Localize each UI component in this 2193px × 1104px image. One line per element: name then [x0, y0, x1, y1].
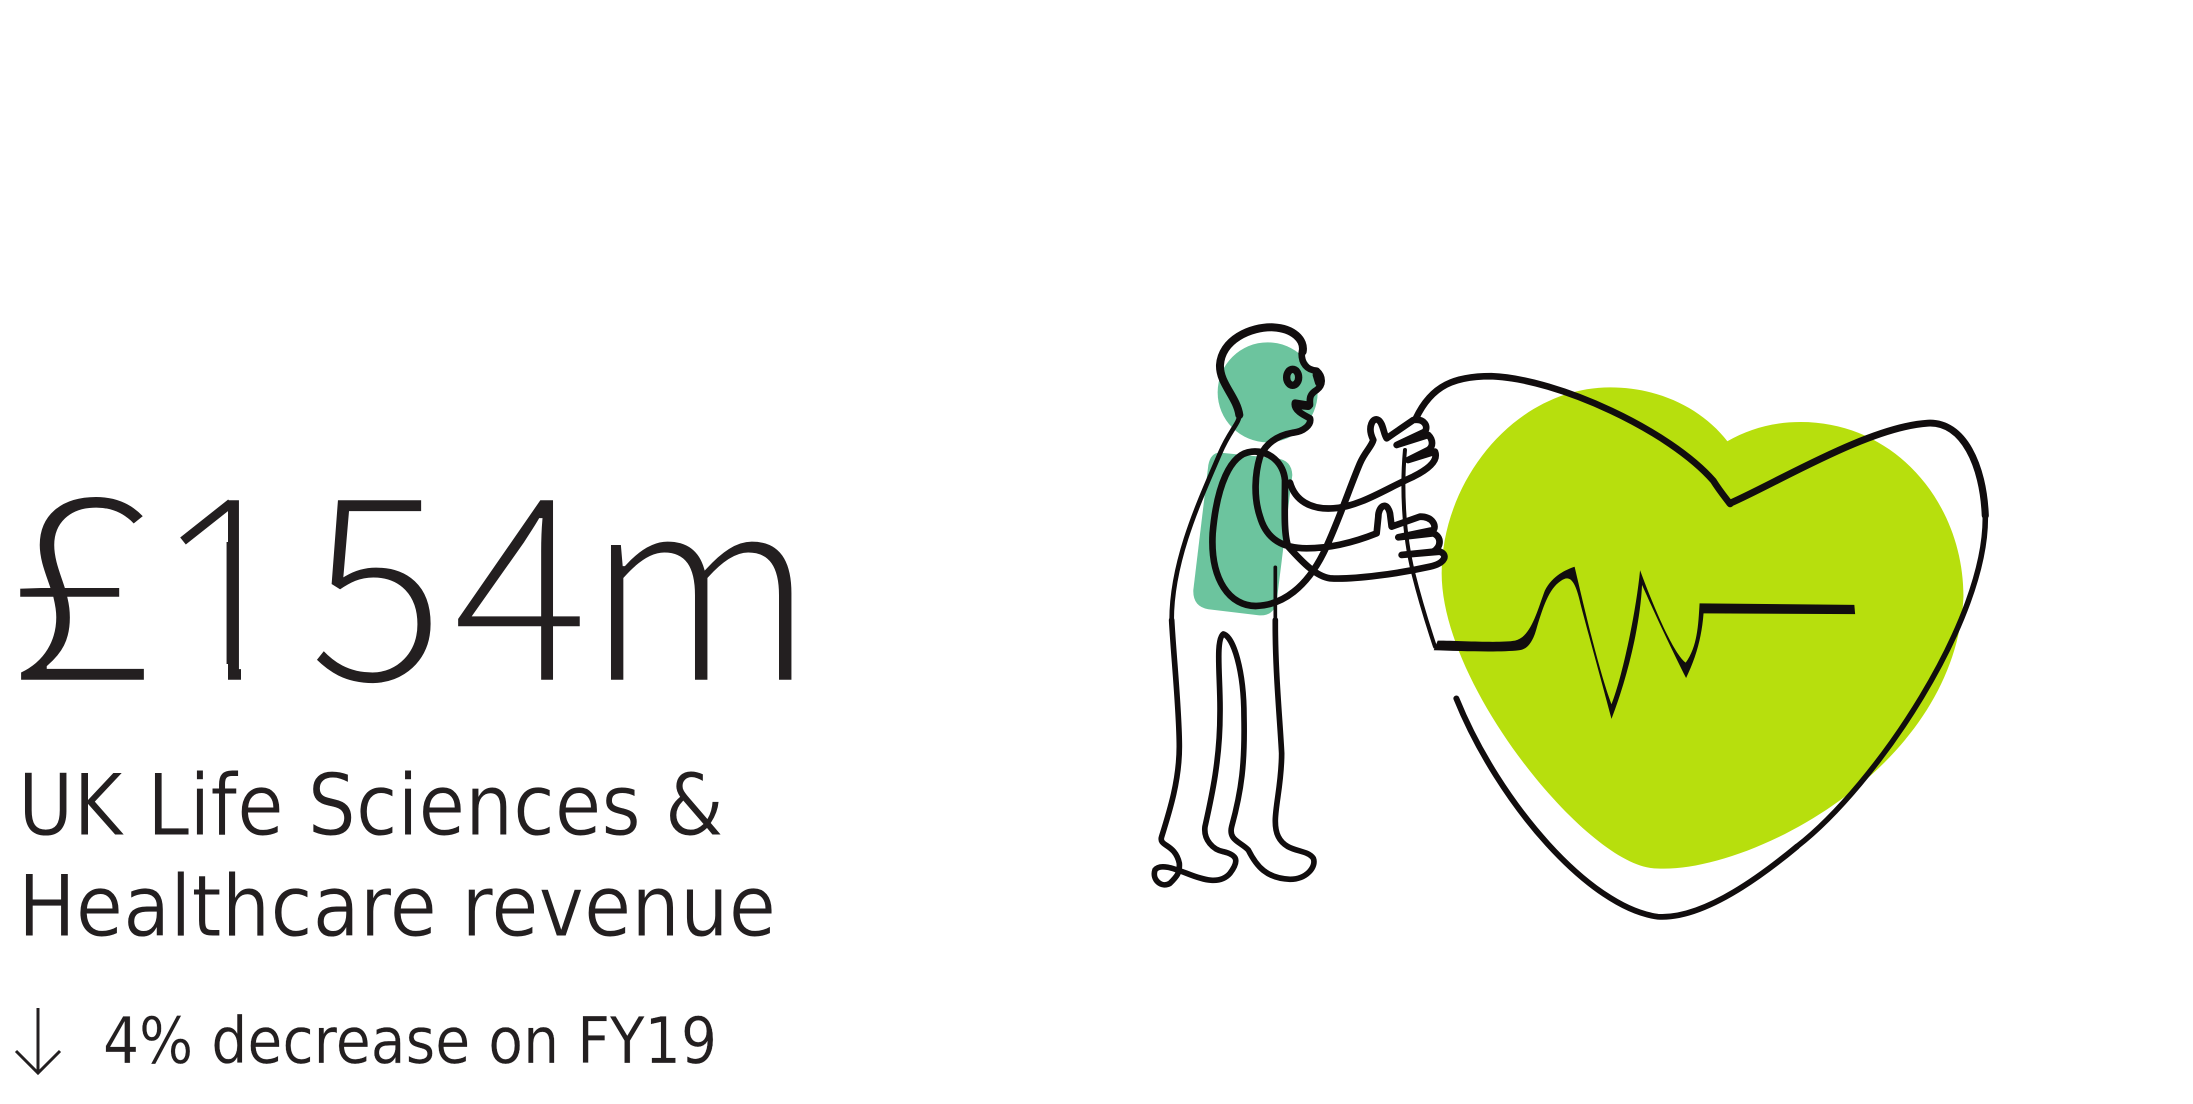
illustration: lime heart	[1442, 387, 1963, 869]
headline figure: £154m: 154m	[159, 384, 816, 756]
icon: down arrow	[16, 1008, 60, 1073]
label: UK Life Sciences & Healthcare revenue: Healthcare revenue	[18, 857, 776, 957]
label: UK Life Sciences & Healthcare revenue: UK Life Sciences &	[18, 756, 724, 856]
illustration: person green fill	[1193, 342, 1318, 615]
illustration: heartbeat trace	[1434, 567, 1855, 719]
illustration: person legs outline	[1154, 620, 1314, 885]
label: UK Life Sciences & Healthcare revenue	[18, 756, 776, 957]
illustration: heart outline	[1416, 376, 1985, 917]
eye	[1287, 369, 1299, 385]
illustration: stethoscope tube	[1403, 450, 1435, 647]
illustration: person upper body outline	[1172, 327, 1444, 620]
headline figure: £154m: £	[1, 383, 162, 755]
change note: 4% decrease on FY19: 4% decrease on FY19	[103, 1005, 717, 1079]
inner body line	[1270, 567, 1281, 620]
mouth	[1297, 375, 1319, 406]
